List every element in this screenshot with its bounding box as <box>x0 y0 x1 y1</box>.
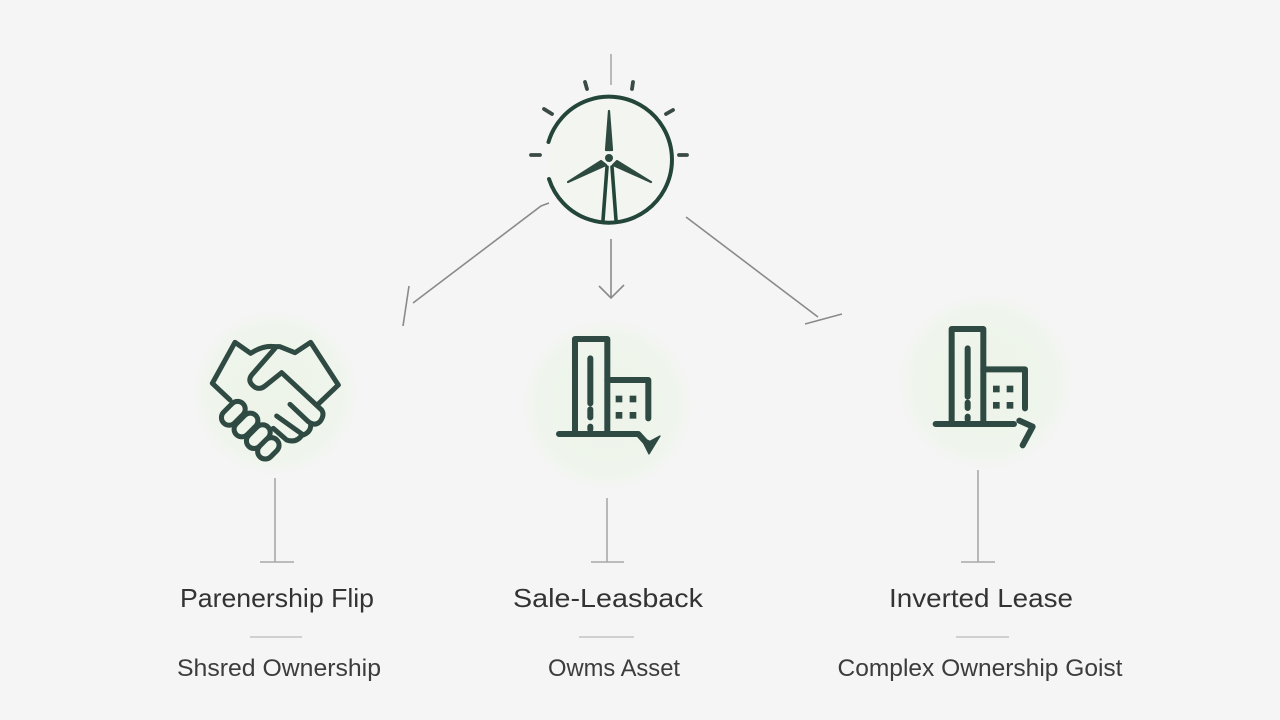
panel: Sale-Leaseback <box>513 318 704 682</box>
stem <box>961 470 995 562</box>
divider <box>579 636 634 638</box>
heading: Sale-Leasback <box>513 583 704 613</box>
heading: Parenership Flip <box>180 583 374 613</box>
panel: Partnership Flip <box>177 309 381 682</box>
subtext: Owms Asset <box>548 655 680 682</box>
arrow: centre down <box>599 239 624 298</box>
stem <box>260 478 294 562</box>
divider <box>956 636 1009 638</box>
icon background: right halo <box>896 293 1074 471</box>
icon: handshake <box>212 342 338 462</box>
icon: wind turbine in sun circle <box>531 82 687 223</box>
subtext: Complex Ownership Goist <box>838 655 1123 682</box>
icon: building with chevron <box>936 329 1033 445</box>
divider <box>250 636 302 638</box>
icon: building with down arrow <box>559 339 660 454</box>
stem <box>591 498 624 562</box>
heading: Inverted Lease <box>889 583 1073 613</box>
arrow: to right branch <box>686 217 842 324</box>
icon background: left halo <box>191 309 359 477</box>
panel: Inverted Lease <box>838 293 1123 682</box>
arrow: to left branch <box>403 203 549 326</box>
connector: top vertical line <box>610 54 612 85</box>
icon background: centre halo <box>520 318 694 492</box>
subtext: Shsred Ownership <box>177 655 381 682</box>
